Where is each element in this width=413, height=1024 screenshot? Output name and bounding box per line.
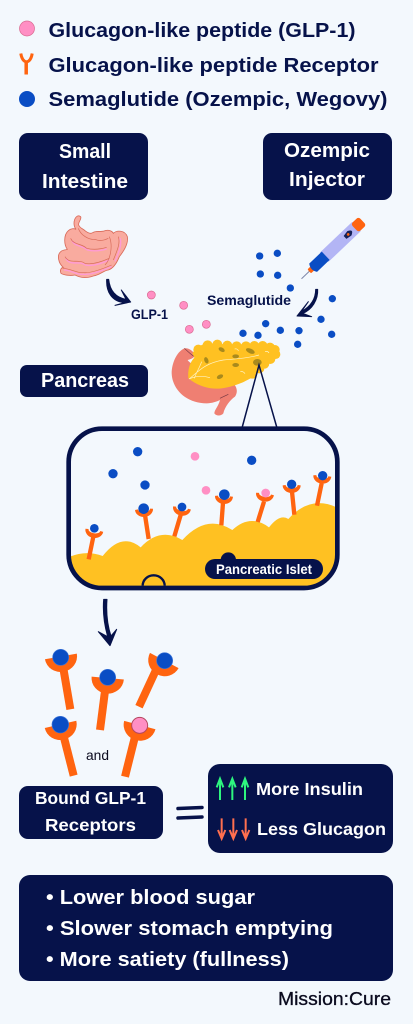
label: small intestine — [19, 133, 148, 200]
legend label: semaglutide: Semaglutide (Ozempic, Wegovy) — [48, 89, 388, 111]
text: less glucagon: Less Glucagon — [257, 819, 386, 839]
label: small intestine: Intestine — [42, 171, 128, 193]
label: ozempic injector: Injector — [289, 169, 365, 191]
zoom lines: pancreas to islet — [242, 365, 277, 428]
legend label: receptor: Glucagon-like peptide Receptor — [48, 55, 379, 77]
icon: ozempic pen — [297, 216, 367, 283]
label: ozempic injector — [263, 133, 392, 200]
icon: receptor — [21, 54, 32, 74]
label: pancreatic islet — [205, 559, 323, 579]
panel: effects: • More satiety (fullness) — [46, 949, 289, 971]
panel: effects — [19, 875, 393, 981]
icon: GLP-1 dot — [20, 21, 34, 36]
free molecules — [108, 447, 256, 490]
label: bound GLP-1 receptors: Bound GLP-1 — [35, 788, 146, 808]
text: more insulin: More Insulin — [256, 779, 363, 799]
label: pancreas — [20, 365, 148, 397]
equals sign — [178, 808, 202, 818]
icon: green up arrows — [217, 779, 248, 800]
arrow: intestine to GLP-1 — [107, 279, 131, 305]
label: GLP-1: GLP-1 — [131, 306, 168, 322]
arrow: down to bound receptors — [98, 599, 117, 646]
label: semaglutide: Semaglutide — [207, 292, 291, 308]
legend label: GLP-1: Glucagon-like peptide (GLP-1) — [48, 20, 356, 42]
icon: pancreas — [172, 340, 280, 415]
semaglutide molecules — [239, 250, 336, 348]
panel: effects: • Lower blood sugar — [46, 887, 255, 909]
icon: small intestine — [58, 216, 128, 278]
label: pancreatic islet: Pancreatic Islet — [216, 561, 312, 577]
GLP-1 molecules — [147, 291, 210, 333]
text: and: and — [86, 747, 109, 763]
arrow: injector to pancreas — [297, 289, 318, 317]
label: pancreas: Pancreas — [41, 370, 129, 392]
panel background — [69, 429, 337, 588]
panel: effects: • Slower stomach emptying — [46, 918, 333, 940]
receptors on the islet — [89, 483, 322, 559]
icon: semaglutide dot — [19, 91, 35, 107]
label: ozempic injector: Ozempic — [284, 140, 370, 162]
label: bound GLP-1 receptors: Receptors — [45, 815, 136, 835]
label: bound GLP-1 receptors — [19, 786, 163, 839]
label: small intestine: Small — [59, 141, 111, 163]
credit: Mission:Cure: Mission:Cure — [278, 989, 391, 1009]
panel outline — [69, 429, 337, 588]
bound receptors — [45, 649, 179, 777]
legend — [19, 20, 388, 111]
icon: coral down arrows — [218, 818, 249, 839]
panel: pancreatic islet close-up — [69, 429, 337, 588]
islet tissue — [70, 503, 337, 587]
panel: results — [208, 764, 393, 853]
